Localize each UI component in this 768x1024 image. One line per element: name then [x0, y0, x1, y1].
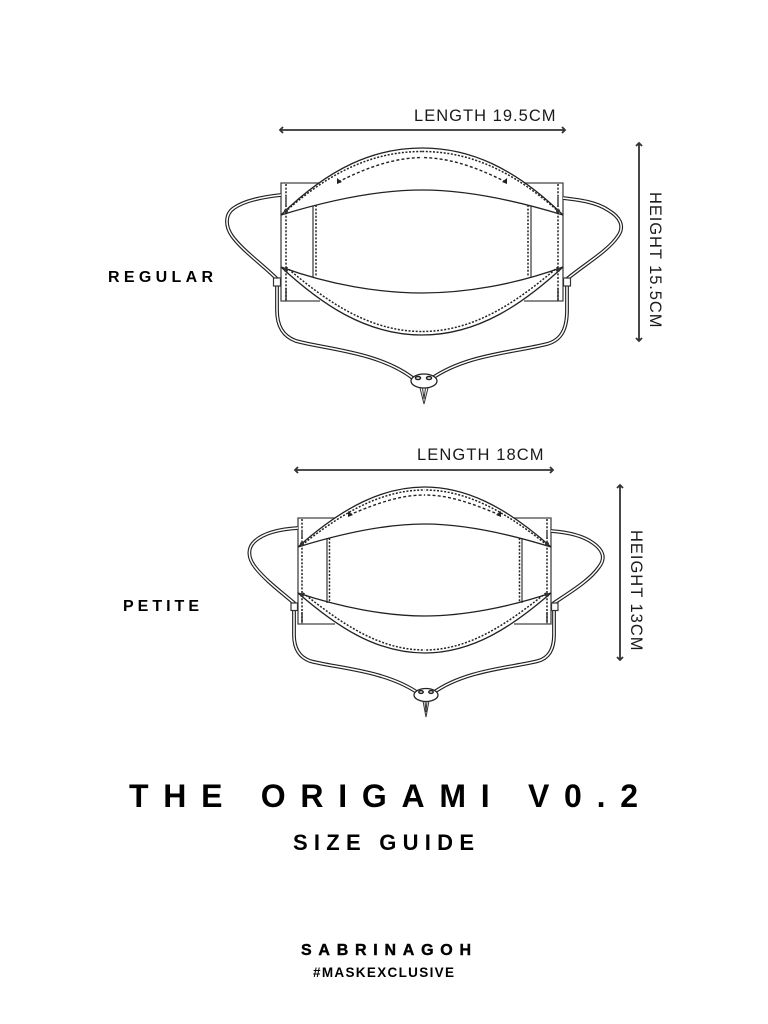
height label: HEIGHT 15.5CM: [646, 192, 664, 328]
left cord stopper: [274, 278, 280, 286]
petite size label: PETITE: [123, 598, 199, 615]
petite length dimension: [295, 446, 553, 473]
panel stitching: [312, 206, 314, 277]
length arrow: [280, 127, 565, 133]
hashtag: #MASKEXCLUSIVE: [313, 965, 454, 980]
toggle: [411, 374, 437, 404]
regular height dimension: [636, 143, 664, 341]
mask top arc: [298, 487, 424, 547]
title: THE ORIGAMI V0.2: [129, 778, 638, 814]
toggle: [414, 688, 438, 717]
left cord: [249, 528, 418, 693]
height arrow: [636, 143, 642, 341]
right cord stopper: [552, 603, 558, 610]
regular size label: REGULAR: [108, 269, 213, 286]
fold marks: [284, 209, 288, 213]
regular length dimension: [280, 107, 565, 133]
length label: LENGTH 18CM: [417, 446, 544, 464]
petite height dimension: [617, 485, 645, 660]
length label: LENGTH 19.5CM: [414, 107, 556, 125]
right half: [424, 487, 551, 653]
mask inner curves: [298, 524, 424, 616]
subtitle: SIZE GUIDE: [293, 830, 474, 855]
left cord stopper: [291, 603, 298, 610]
brand name: SABRINAGOH: [301, 942, 471, 959]
height label: HEIGHT 13CM: [627, 530, 645, 650]
left half: [298, 487, 424, 653]
mask diagram: petite: [249, 487, 603, 717]
mask diagram: regular: [227, 148, 621, 404]
mask bottom arc: [281, 267, 422, 335]
right half: [422, 148, 563, 335]
left cord: [227, 195, 414, 379]
panel outline: [298, 518, 335, 624]
height arrow: [617, 485, 623, 660]
panel outline: [281, 183, 320, 301]
right cord: [433, 531, 603, 693]
mask bottom arc: [298, 593, 424, 653]
length arrow: [295, 467, 553, 473]
left half: [281, 148, 422, 335]
right cord stopper: [564, 278, 570, 286]
mask top arc: [281, 148, 422, 215]
panel stitching: [326, 538, 328, 603]
mask inner curves: [281, 190, 422, 293]
right cord: [431, 198, 621, 379]
fold marks: [300, 542, 304, 546]
